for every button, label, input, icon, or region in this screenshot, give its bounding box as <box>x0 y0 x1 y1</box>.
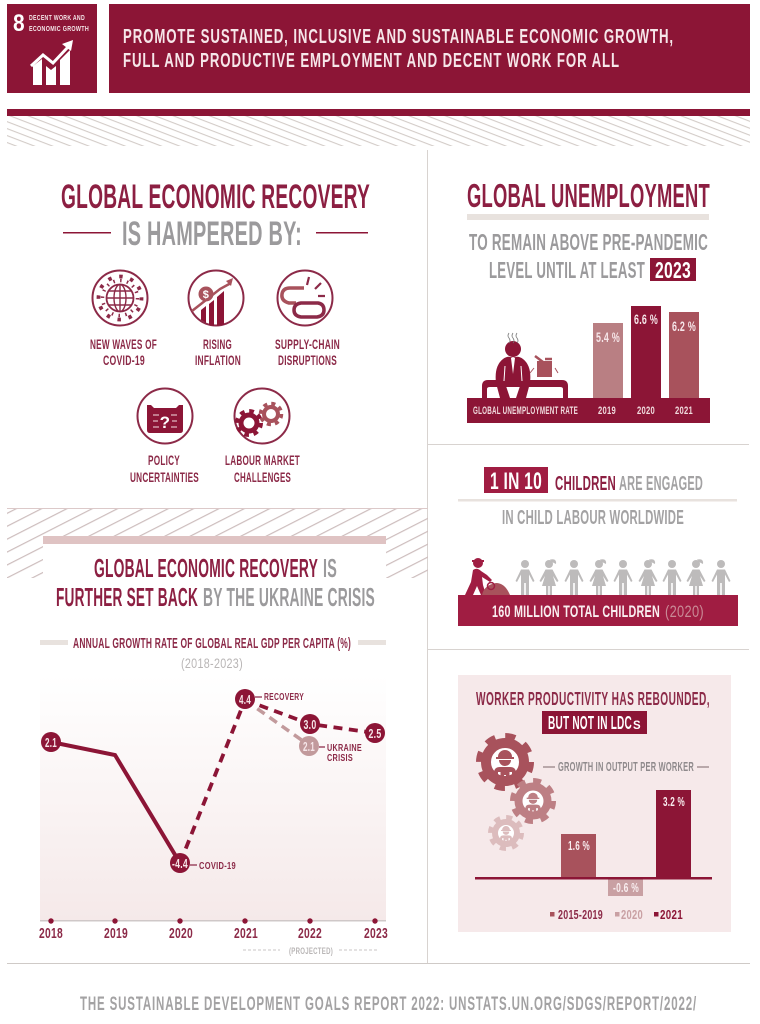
heading: global unemployment: LEVEL UNTIL AT LEAST <box>489 257 645 283</box>
heading: further set back: IS <box>323 553 337 583</box>
line chart: (PROJECTED) <box>289 946 333 957</box>
factor: policy uncertainties: POLICY <box>148 452 180 468</box>
heading: worker productivity: S <box>633 718 641 732</box>
bar chart: unemployment rate: 6.2 % <box>672 318 696 334</box>
chart subtitle: ANNUAL GROWTH RATE OF GLOBAL REAL GDP PER CAPITA (%) <box>73 635 351 652</box>
factor: rising inflation <box>188 270 244 368</box>
SDG 8 logo tile: ECONOMIC GROWTH <box>29 26 89 33</box>
line chart: RECOVERY <box>264 692 304 703</box>
heading: global economic recovery is hampered by: IS HAMPERED BY: <box>122 215 302 253</box>
panel: global unemployment <box>467 177 710 423</box>
icon row: children <box>516 559 730 595</box>
line chart: 4.4 <box>239 692 251 707</box>
bar chart: unemployment rate: 5.4 % <box>596 329 620 345</box>
factor: new waves of covid-19 <box>90 270 157 368</box>
heading: further set back <box>56 553 375 612</box>
factor: new waves of covid-19: COVID-19 <box>103 352 145 368</box>
line chart: 2.1 <box>303 739 315 754</box>
icon: dollar and rising bars: $ <box>203 289 209 301</box>
heading: 1 in 10 children <box>458 467 737 529</box>
legend: 2020 <box>621 907 643 922</box>
panel: child labour <box>458 467 738 626</box>
bar chart: output per worker: 3.2 % <box>663 794 685 809</box>
icon: two gears <box>234 388 290 444</box>
heading: further set back: FURTHER SET BACK <box>56 582 198 612</box>
line chart: 2023 <box>364 925 388 942</box>
line chart: 2020 <box>169 925 193 942</box>
panel: ukraine crisis chart <box>39 536 388 957</box>
band: 160 million total children <box>458 595 738 626</box>
factor: supply-chain disruptions: DISRUPTIONS <box>278 352 337 368</box>
bar chart: unemployment rate <box>467 306 710 423</box>
line chart: UKRAINE <box>327 743 362 754</box>
icon: medium gear with worker <box>513 781 553 821</box>
heading: further set back: GLOBAL ECONOMIC RECOVERY <box>94 553 318 583</box>
icon: virus globe <box>92 270 148 326</box>
icon: small gear with worker <box>490 818 522 848</box>
icon: broken chain <box>278 270 332 326</box>
bar chart: unemployment rate: 2021 <box>675 405 693 417</box>
SDG 8 logo tile: DECENT WORK AND <box>29 15 85 22</box>
legend: 2021 <box>660 907 683 922</box>
factor: new waves of covid-19: NEW WAVES OF <box>90 336 157 352</box>
factor: supply-chain disruptions: SUPPLY-CHAIN <box>275 336 340 352</box>
SDG 8 logo tile: 8 <box>13 10 25 37</box>
bar chart: unemployment rate: GLOBAL UNEMPLOYMENT RATE <box>473 405 578 417</box>
icon: document with question mark: ? <box>160 413 170 432</box>
line chart: 3.0 <box>304 717 316 732</box>
heading: worker productivity: BUT NOT IN LDC <box>548 713 632 733</box>
heading: global unemployment <box>467 177 710 283</box>
factor: policy uncertainties: UNCERTAINTIES <box>130 469 199 485</box>
panel: worker productivity <box>458 675 731 932</box>
heading: global economic recovery is hampered by: GLOBAL ECONOMIC RECOVERY <box>61 178 370 216</box>
heading: global economic recovery is hampered by <box>61 178 370 253</box>
icon: large gear with worker <box>480 737 530 787</box>
bar chart: output per worker <box>475 790 712 896</box>
bar chart: output per worker: 1.6 % <box>568 838 590 853</box>
heading: global unemployment: 2023 <box>655 257 691 283</box>
chart subtitle: (2018-2023) <box>181 655 243 671</box>
goal banner <box>109 4 750 93</box>
line chart: 2022 <box>298 925 322 942</box>
chart subtitle <box>40 635 386 671</box>
heading: worker productivity <box>476 688 710 734</box>
SDG 8 logo tile <box>7 4 97 93</box>
factor: policy uncertainties <box>130 388 199 485</box>
heading: 1 in 10 children: CHILDREN <box>555 473 616 495</box>
bar chart: unemployment rate: 2019 <box>598 405 616 417</box>
legend: 2015-2019 <box>558 907 603 922</box>
icon: unemployed person on bench <box>482 333 568 398</box>
heading: further set back: BY THE UKRAINE CRISIS <box>203 582 375 612</box>
bar chart: unemployment rate: 6.6 % <box>634 311 658 327</box>
line chart: CRISIS <box>327 753 353 764</box>
factor: labour market challenges <box>225 388 300 485</box>
line chart: 2.5 <box>368 726 382 741</box>
line chart <box>39 675 388 957</box>
factor: supply-chain disruptions <box>275 270 340 368</box>
factor: rising inflation: INFLATION <box>195 352 241 368</box>
line chart: 2019 <box>104 925 128 942</box>
line chart: 2021 <box>234 925 258 942</box>
legend <box>550 907 683 922</box>
factor: rising inflation: RISING <box>203 336 232 352</box>
line chart: 2.1 <box>45 735 57 750</box>
bar chart: output per worker: -0.6 % <box>613 880 639 895</box>
band: 160 million total children: (2020) <box>665 602 704 621</box>
line chart: COVID-19 <box>199 861 236 872</box>
icon: child worker with mound <box>465 558 510 595</box>
line chart: -4.4 <box>172 856 188 871</box>
line chart: 2018 <box>39 925 63 942</box>
factor: labour market challenges: CHALLENGES <box>234 469 291 485</box>
bar chart: unemployment rate: 2020 <box>637 405 655 417</box>
band: 160 million total children: 160 MILLION TOTAL CHILDREN <box>492 602 660 621</box>
factor: labour market challenges: LABOUR MARKET <box>225 452 300 468</box>
heading: 1 in 10 children: 1 IN 10 <box>490 468 542 495</box>
